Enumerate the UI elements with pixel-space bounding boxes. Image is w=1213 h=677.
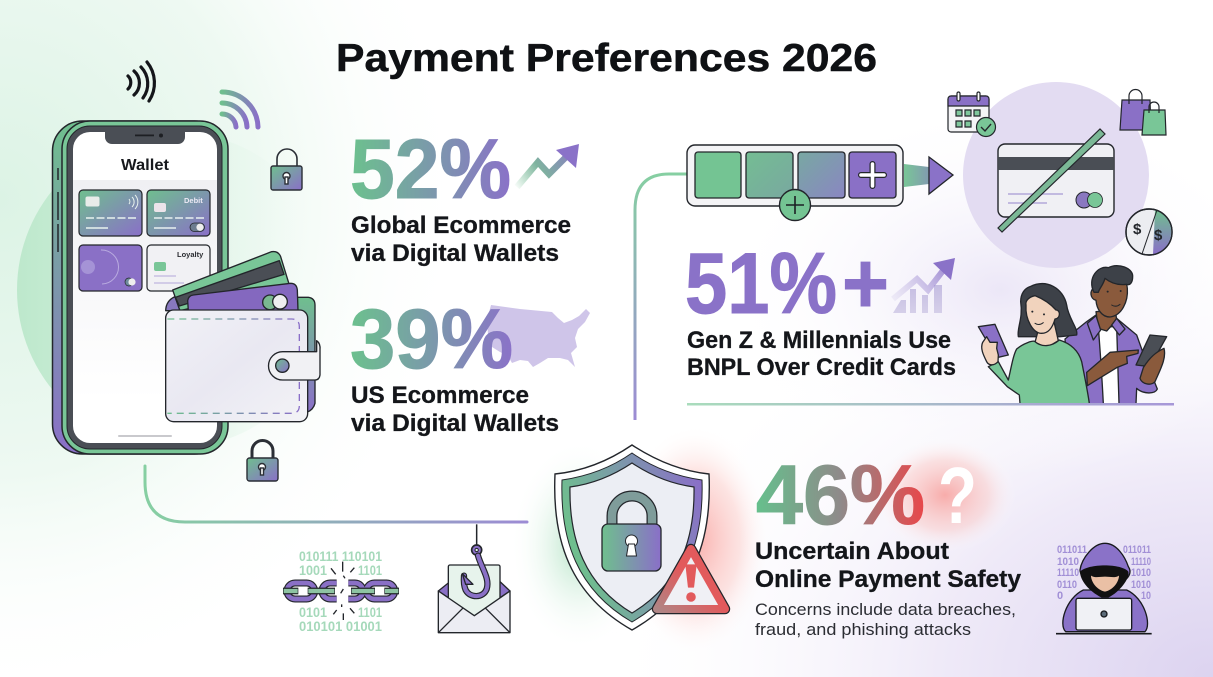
leather wallet xyxy=(166,252,320,422)
binary text: 11110 xyxy=(1057,567,1079,579)
card 2: debit: Debit xyxy=(184,196,203,205)
face xyxy=(1026,296,1059,333)
icon: split dollar coin: $ xyxy=(1133,221,1142,238)
arrow xyxy=(904,157,953,194)
stat: 46 percent xyxy=(755,448,1022,639)
wallet front xyxy=(166,310,308,422)
icon: split dollar coin: $ xyxy=(1154,227,1163,244)
icon: security shield xyxy=(555,445,725,630)
pointing arm xyxy=(1087,350,1138,386)
man's phone xyxy=(1136,335,1167,367)
woman's phone xyxy=(978,324,1008,358)
binary text: 1010 xyxy=(1131,567,1151,579)
illustration: two people with phones xyxy=(978,266,1167,404)
plus badge xyxy=(780,190,810,220)
figure: 46% xyxy=(756,448,925,542)
binary text: 0 xyxy=(1057,590,1063,602)
man xyxy=(1065,266,1167,404)
back panel xyxy=(295,297,315,412)
connector: left to shield xyxy=(145,466,527,522)
home indicator xyxy=(118,435,172,437)
binary text: 1010 xyxy=(1057,556,1079,568)
icon: padlock bottom xyxy=(247,440,278,481)
icon: split dollar coin xyxy=(1126,209,1172,255)
map: USA xyxy=(487,305,590,367)
icon: growth chart xyxy=(893,258,955,313)
notch xyxy=(105,132,185,144)
title: Payment Preferences 2026 xyxy=(336,37,877,80)
icon: broken chain with binary xyxy=(283,548,399,634)
connector: BNPL xyxy=(635,174,687,420)
figure: 39% xyxy=(350,292,513,386)
icon: hacker at laptop xyxy=(1056,543,1152,634)
face shadow xyxy=(1080,565,1129,598)
binary text: 1010 xyxy=(1131,579,1151,591)
sweater xyxy=(988,340,1089,404)
description: fraud, and phishing attacks xyxy=(755,620,971,639)
figure: 51% xyxy=(685,236,837,332)
laptop xyxy=(1076,598,1132,630)
label: Gen Z & Millennials Use xyxy=(687,327,951,354)
binary text xyxy=(1057,544,1151,602)
card 3 xyxy=(79,245,142,291)
icon: phishing envelope xyxy=(438,524,510,633)
label: via Digital Wallets xyxy=(351,410,559,437)
binary text: 011011 xyxy=(1057,544,1087,556)
figure: 52% xyxy=(350,122,511,216)
icon: shopping bags xyxy=(1120,90,1166,135)
chain links xyxy=(283,562,399,620)
padlock xyxy=(602,496,661,571)
figure xyxy=(1056,543,1152,634)
card 1 xyxy=(79,190,142,236)
icon: calendar xyxy=(948,92,996,136)
hood xyxy=(1080,543,1130,582)
binary text: 011011 xyxy=(1123,544,1151,556)
warning triangle xyxy=(657,549,725,609)
installment bar xyxy=(687,145,953,220)
card 4: loyalty xyxy=(147,245,210,291)
binary text: 1101 xyxy=(358,562,382,578)
card 4: loyalty: Loyalty xyxy=(177,250,204,259)
label: US Ecommerce xyxy=(351,382,529,409)
neck xyxy=(1096,310,1117,331)
icon: contactless waves xyxy=(128,62,154,101)
binary text: 010101 01001 xyxy=(299,618,382,634)
clasp strap xyxy=(268,341,320,380)
green card xyxy=(173,252,289,311)
icon: padlock top xyxy=(271,149,302,190)
man's hand xyxy=(1140,348,1165,384)
purple card xyxy=(188,283,298,311)
stat: 51 percent plus xyxy=(685,236,956,381)
card 2: debit xyxy=(147,190,210,236)
binary text: 11110 xyxy=(1131,556,1151,568)
label: Uncertain About xyxy=(755,538,949,565)
hair xyxy=(1018,284,1077,337)
question mark: ? xyxy=(938,451,977,540)
left tab xyxy=(166,297,180,311)
label: via Digital Wallets xyxy=(351,240,559,267)
face xyxy=(1091,576,1119,592)
phone xyxy=(52,121,228,454)
icon: crossed-out credit card xyxy=(998,129,1114,232)
description: Concerns include data breaches, xyxy=(755,600,1016,619)
label: BNPL Over Credit Cards xyxy=(687,354,956,381)
binary text: 0101 xyxy=(299,604,327,620)
binary text: 1001 xyxy=(299,562,327,578)
stat: 52 percent xyxy=(350,122,579,267)
stat: 39 percent xyxy=(350,292,590,437)
side buttons xyxy=(57,168,59,252)
binary text: 1101 xyxy=(358,604,382,620)
binary text: 10 xyxy=(1141,590,1151,602)
neck xyxy=(1035,322,1058,348)
plus sign: + xyxy=(842,236,889,332)
wallet heading: Wallet xyxy=(121,157,170,174)
head xyxy=(1091,277,1127,317)
icon: rising arrow xyxy=(517,144,579,187)
body xyxy=(1063,590,1148,632)
woman xyxy=(978,284,1089,404)
woman's hand xyxy=(982,337,998,365)
icon: wifi arcs xyxy=(222,92,258,127)
label: Global Ecommerce xyxy=(351,212,571,239)
phone shell xyxy=(52,121,224,454)
binary text xyxy=(299,548,382,634)
icon: big lavender circle xyxy=(963,82,1149,268)
binary text: 0110 xyxy=(1057,579,1077,591)
face details xyxy=(1112,304,1120,306)
shirt xyxy=(1065,315,1157,404)
fish hook xyxy=(462,524,487,596)
binary text: 010111 110101 xyxy=(299,548,382,564)
hair xyxy=(1092,266,1133,292)
label: Online Payment Safety xyxy=(755,566,1022,593)
divider rule xyxy=(687,403,1174,406)
